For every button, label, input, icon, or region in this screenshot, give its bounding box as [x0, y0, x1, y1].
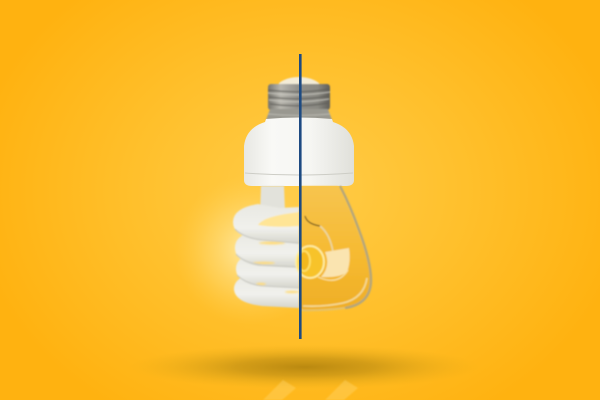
coil 2 — [235, 232, 299, 268]
screw threads — [268, 84, 330, 110]
cap dome — [279, 77, 319, 86]
filament loop — [296, 246, 324, 278]
screw base — [266, 77, 332, 120]
coil 3 — [236, 254, 299, 288]
glass envelope — [300, 186, 371, 310]
floor shadow — [130, 345, 480, 389]
neck — [260, 186, 285, 216]
blue divider line — [299, 54, 302, 339]
glow behind spiral lamp — [175, 175, 325, 325]
coil 4 — [234, 274, 299, 308]
filament wire — [305, 216, 320, 226]
glass edge highlight — [340, 186, 371, 308]
coil shading — [235, 229, 299, 288]
faint chevron marks at bottom — [263, 380, 358, 400]
base collar — [266, 109, 332, 120]
half spiral CFL tube — [233, 186, 299, 308]
inner opening of top coil — [258, 212, 299, 227]
reflector highlight — [321, 248, 350, 277]
coil 1 — [233, 204, 299, 244]
coil gaps — [253, 242, 299, 293]
lamp holder white body — [244, 118, 354, 186]
half clear incandescent glass — [296, 186, 371, 310]
